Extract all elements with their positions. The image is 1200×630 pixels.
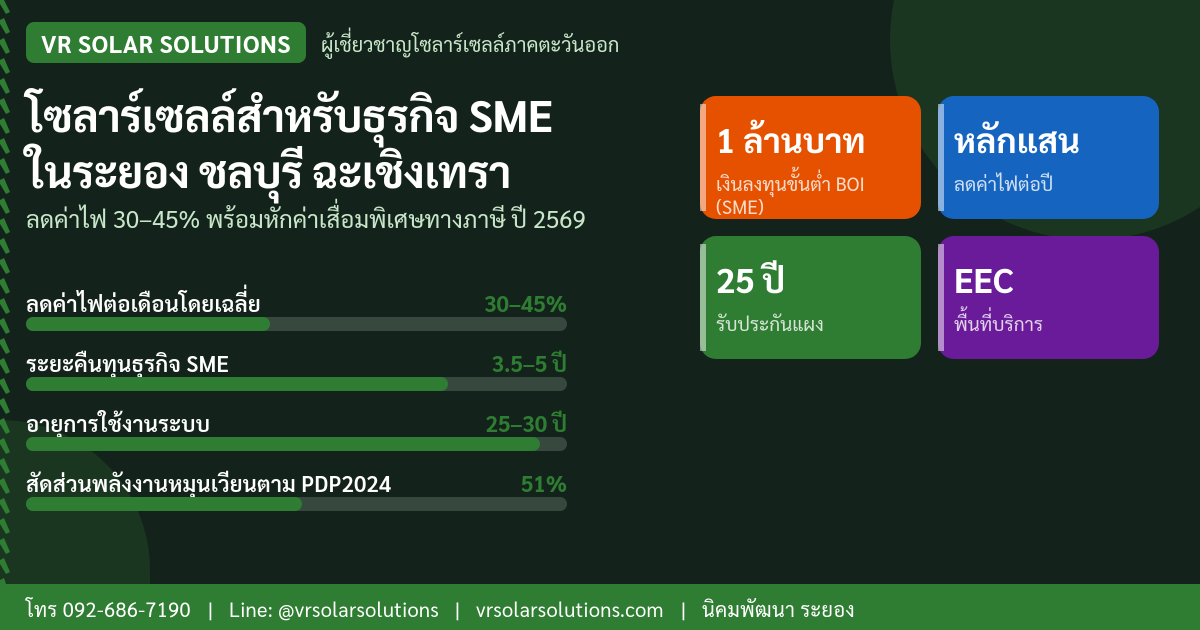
metric: renewable share: สัดส่วนพลังงานหมุนเวียนตาม PDP2024 (26, 470, 391, 498)
card: annual saving: ลดค่าไฟต่อปี (954, 172, 1053, 196)
metric: system lifetime (26, 410, 567, 451)
metric: electricity saving (26, 284, 567, 331)
title: โซลาร์เซลล์สำหรับธุรกิจ SME (26, 86, 552, 143)
card: warranty: 25 ปี (716, 257, 785, 301)
card: service area: EEC (954, 257, 1014, 301)
footer bar: นิคมพัฒนา ระยอง (702, 596, 855, 622)
card: warranty (700, 236, 921, 359)
subtitle: ลดค่าไฟ 30–45% พร้อมหักค่าเสื่อมพิเศษทางภาษี ปี 2569 (26, 202, 586, 234)
footer bar: Line: @vrsolarsolutions (229, 596, 439, 622)
card: annual saving (938, 96, 1159, 219)
metric: electricity saving: 30–45% (484, 290, 567, 318)
footer bar: vrsolarsolutions.com (476, 596, 664, 622)
card: service area: พื้นที่บริการ (954, 312, 1043, 336)
metric: system lifetime: อายุการใช้งานระบบ (26, 410, 210, 438)
footer bar: | (208, 596, 213, 622)
brand badge: VR SOLAR SOLUTIONS (41, 27, 291, 59)
card: service area (938, 236, 1159, 359)
title: ในระยอง ชลบุรี ฉะเชิงเทรา (26, 142, 511, 199)
footer bar (0, 584, 1200, 630)
brand badge (26, 22, 306, 63)
footer bar: | (681, 596, 686, 622)
metric: electricity saving: ลดค่าไฟต่อเดือนโดยเฉลี่ย (26, 290, 261, 318)
footer bar: โทร 092-686-7190 (26, 596, 191, 622)
footer bar: | (455, 596, 460, 622)
metric: system lifetime: 25–30 ปี (486, 410, 567, 438)
decorative circle: bottom left (0, 420, 150, 630)
decorative circle: top right (890, 0, 1200, 240)
card: minimum investment: เงินลงทุนขั้นต่ำ BOI (716, 172, 865, 196)
card: minimum investment (700, 96, 921, 219)
metric: payback (26, 350, 567, 391)
metric: renewable share: 51% (521, 470, 567, 498)
card: warranty: รับประกันแผง (716, 312, 824, 336)
metric: payback: 3.5–5 ปี (492, 350, 567, 378)
card: annual saving: หลักแสน (954, 117, 1080, 161)
card: minimum investment: (SME) (716, 195, 764, 219)
metric: payback: ระยะคืนทุนธุรกิจ SME (26, 350, 229, 378)
title (23, 86, 552, 204)
left dashed stripe (0, 0, 10, 584)
tagline: ผู้เชี่ยวชาญโซลาร์เซลล์ภาคตะวันออก (321, 31, 619, 57)
metric: renewable share (26, 470, 567, 511)
card: minimum investment: 1 ล้านบาท (716, 117, 866, 161)
